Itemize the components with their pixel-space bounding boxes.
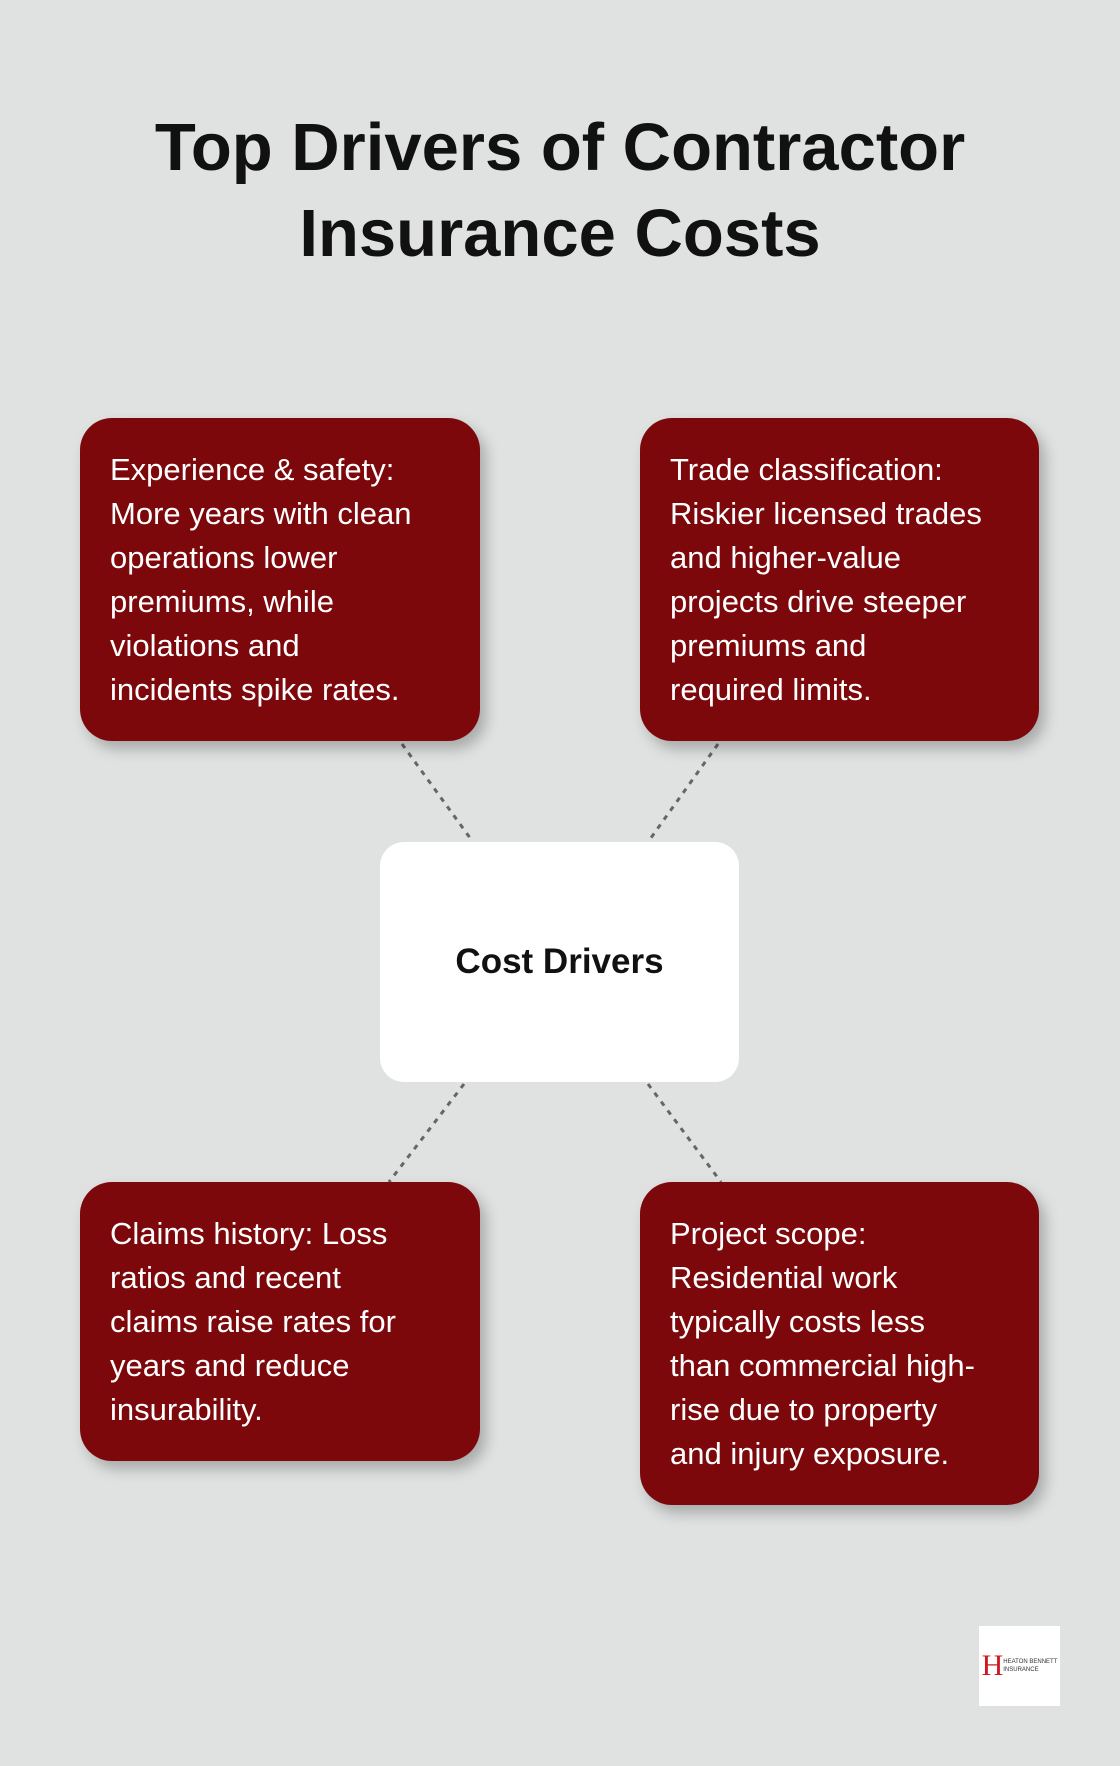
panel: trade: projects drive steeper bbox=[670, 584, 966, 619]
panel: claims: ratios and recent bbox=[110, 1260, 341, 1295]
panel: scope: typically costs less bbox=[670, 1304, 925, 1339]
title: Top Drivers of Contractor bbox=[155, 110, 965, 185]
panel: claims: insurability. bbox=[110, 1392, 263, 1427]
panel: scope: Project scope: bbox=[670, 1216, 866, 1251]
panel: trade: Trade classification: bbox=[670, 452, 943, 487]
panel: trade: and higher-value bbox=[670, 540, 901, 575]
panel: claims: claims raise rates for bbox=[110, 1304, 396, 1339]
panel: experience: premiums, while bbox=[110, 584, 334, 619]
panel: scope: than commercial high- bbox=[670, 1348, 975, 1383]
center node: Cost Drivers bbox=[455, 942, 664, 981]
title bbox=[155, 110, 965, 271]
panel: scope bbox=[640, 1182, 1039, 1505]
panel: experience: operations lower bbox=[110, 540, 337, 575]
logo: HEATON BENNETT bbox=[1003, 1659, 1057, 1665]
panel: scope: and injury exposure. bbox=[670, 1436, 949, 1471]
logo: INSURANCE bbox=[1003, 1667, 1039, 1673]
panel: experience: incidents spike rates. bbox=[110, 672, 399, 707]
panel: trade bbox=[640, 418, 1039, 741]
panel: experience: violations and bbox=[110, 628, 300, 663]
panel: experience bbox=[80, 418, 480, 741]
panel: scope: Residential work bbox=[670, 1260, 897, 1295]
panel: claims bbox=[80, 1182, 480, 1461]
panel: trade: required limits. bbox=[670, 672, 872, 707]
logo bbox=[979, 1626, 1060, 1706]
panel: trade: premiums and bbox=[670, 628, 866, 663]
panel: trade: Riskier licensed trades bbox=[670, 496, 982, 531]
panel: claims: years and reduce bbox=[110, 1348, 350, 1383]
logo: H bbox=[982, 1649, 1003, 1682]
panel: experience: Experience & safety: bbox=[110, 452, 394, 487]
center node bbox=[380, 842, 739, 1082]
panel: experience: More years with clean bbox=[110, 496, 412, 531]
panel: claims: Claims history: Loss bbox=[110, 1216, 387, 1251]
title: Insurance Costs bbox=[299, 196, 821, 271]
panel: scope: rise due to property bbox=[670, 1392, 937, 1427]
